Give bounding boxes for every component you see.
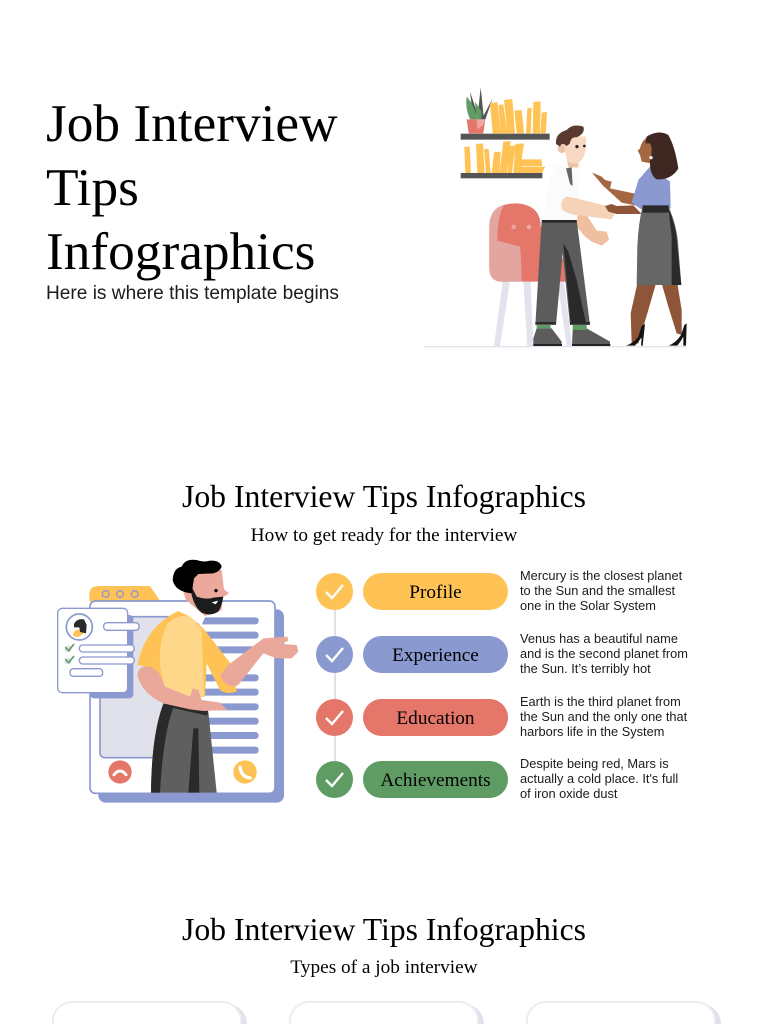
description: achievements: of iron oxide dust [520,786,617,801]
description: profile: Mercury is the closest planet [520,568,682,583]
description: profile: to the Sun and the smallest [520,583,675,598]
description: experience: Venus has a beautiful name [520,631,678,646]
description: achievements: Despite being red, Mars is [520,756,669,771]
description: education: the Sun and the only one that [520,709,687,724]
description: profile [520,568,682,613]
description: experience: the Sun. It’s terribly hot [520,661,651,676]
timeline connector [334,600,336,770]
main title: Job Interview [46,94,338,153]
step: profile: Profile [409,582,462,603]
woman [592,133,687,346]
icon: check [325,647,344,663]
step: achievements: Achievements [380,770,491,791]
description: achievements [520,756,678,801]
step: education [316,699,508,736]
resume card [58,608,139,698]
card 2 [289,1001,479,1024]
step: achievements [316,761,508,798]
description: education: harbors life in the System [520,724,664,739]
description: achievements: actually a cold place. It's full [520,771,678,786]
description: profile: one in the Solar System [520,598,656,613]
books on lower shelf [464,141,545,173]
main title: Tips [46,158,139,217]
yellow browser tab [89,586,161,602]
description: experience: and is the second planet from [520,646,688,661]
lower shelf [461,173,542,178]
plant and books on upper shelf [466,87,547,133]
icon: check [325,584,344,600]
icon: hang up button [108,760,132,784]
illustration: video call with resume [57,560,298,803]
card 3 [526,1001,716,1024]
description: experience [520,631,688,676]
step: profile [316,573,508,610]
section subheading 1: How to get ready for the interview [251,525,517,546]
chair [489,203,572,346]
main title [46,94,338,281]
main title: Infographics [46,222,315,281]
step: experience [316,636,508,673]
upper shelf [461,134,550,140]
screen [90,601,275,793]
video panel [100,617,187,758]
card 1 [52,1001,242,1024]
man [533,126,615,346]
icon: answer button [233,760,257,784]
description: education: Earth is the third planet from [520,694,681,709]
step: education: Education [396,708,475,729]
screen back shadow [98,609,284,803]
description: education [520,694,688,739]
man presenting [137,560,298,793]
subtitle: Here is where this template begins [46,283,339,304]
section heading 1: Job Interview Tips Infographics [182,479,586,514]
icon: check [325,772,344,788]
section heading 2: Job Interview Tips Infographics [182,912,586,947]
section subheading 2: Types of a job interview [290,957,478,978]
illustration: job interview handshake [423,88,687,348]
icon: check [325,710,344,726]
text lines [197,617,259,754]
floor line [423,346,687,347]
step: experience: Experience [392,645,479,666]
